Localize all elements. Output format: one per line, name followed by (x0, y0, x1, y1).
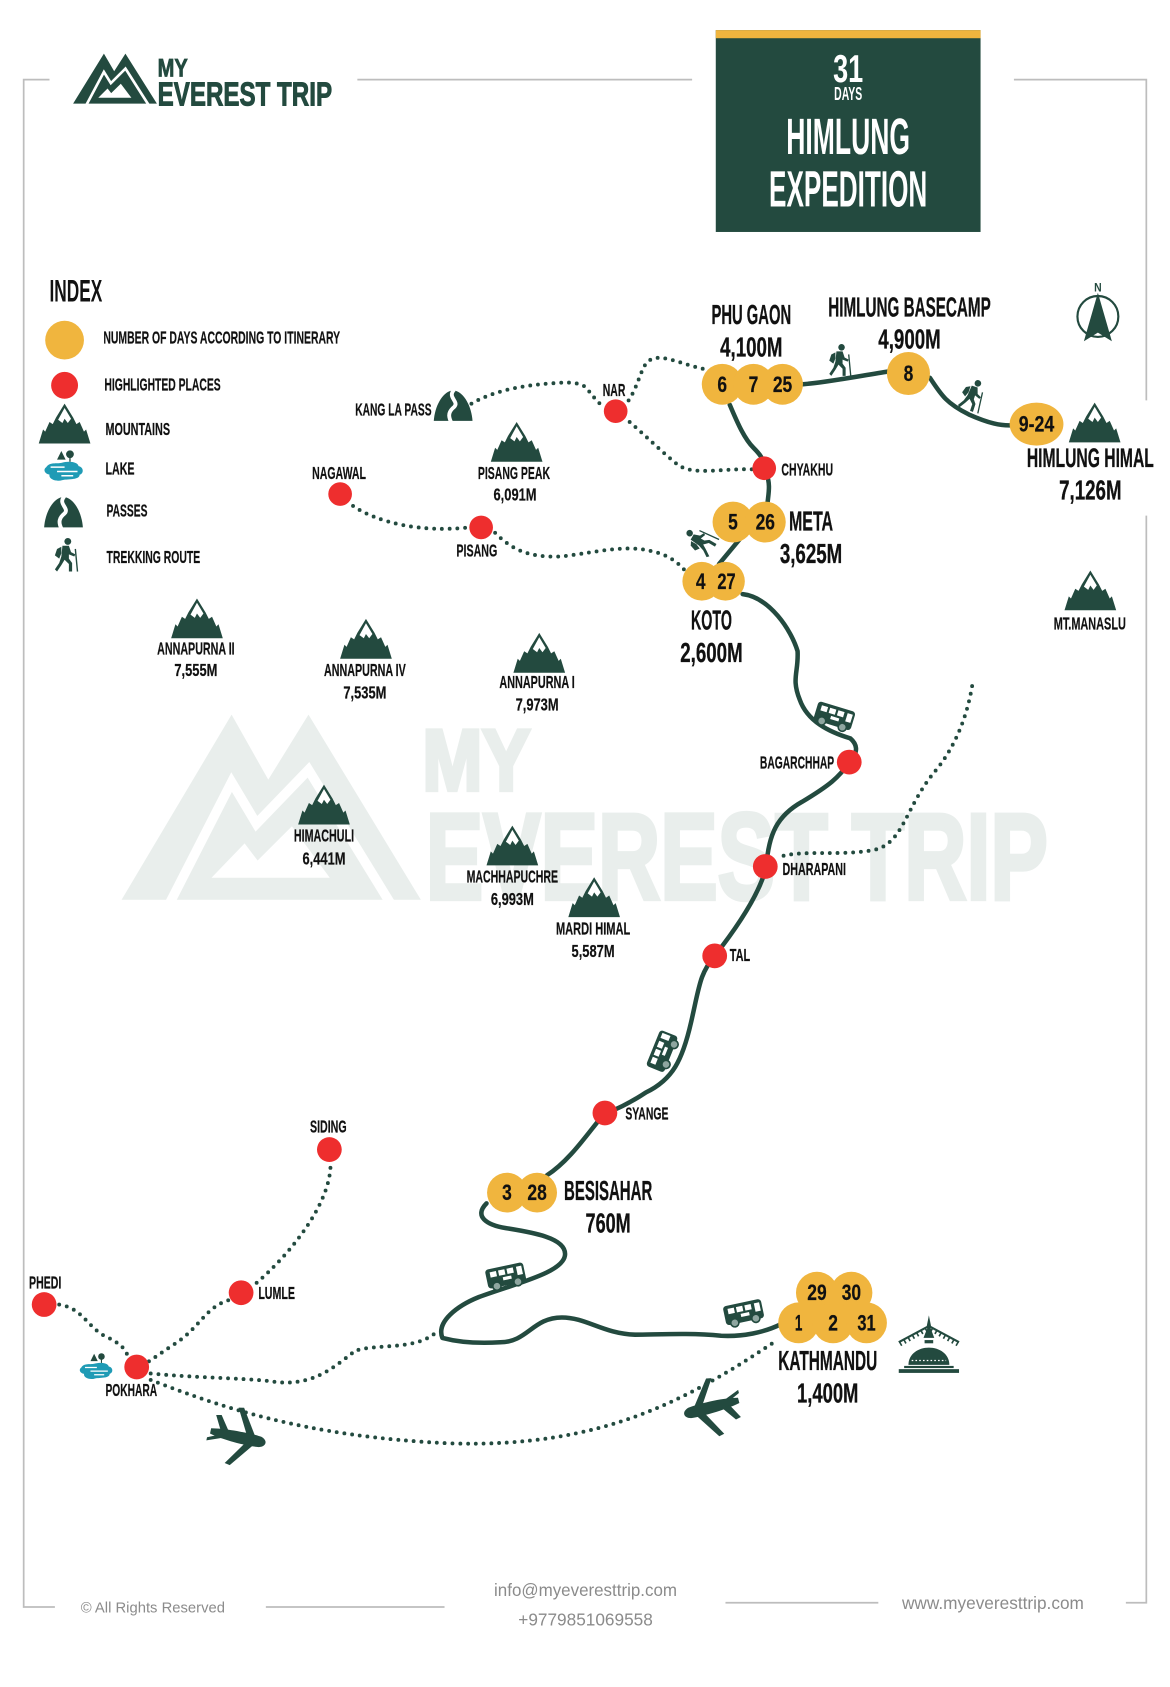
title panel: 31 (833, 48, 863, 91)
label: phu gaon: PHU GAON (711, 299, 791, 330)
mountain: annapurna i: ANNAPURNA I (499, 672, 575, 692)
title panel (716, 30, 981, 232)
index legend: INDEX (50, 273, 102, 308)
icon: climber near meta (681, 524, 719, 558)
days: koto (682, 562, 745, 601)
mountain: himlung himal (1027, 403, 1154, 505)
days: phu gaon: 7 (749, 372, 758, 397)
mountain: manaslu (1054, 570, 1126, 634)
days: phu gaon: 6 (717, 372, 727, 397)
solid trekking route north section (441, 371, 1014, 1343)
days: kathmandu: 30 (842, 1280, 861, 1305)
mountain: machhapuchre: MACHHAPUCHRE (467, 867, 558, 887)
mountain: himlung himal: 7,126M (1059, 474, 1122, 505)
mountain: annapurna ii (157, 598, 235, 680)
footer: copyright: © All Rights Reserved (81, 1600, 225, 1616)
days: meta: 5 (728, 510, 738, 535)
logo: EVEREST TRIP (158, 76, 332, 113)
mountain: pisang peak: PISANG PEAK (478, 463, 550, 483)
place labels: POKHARA (105, 1380, 157, 1400)
place labels: KANG LA PASS (355, 399, 432, 419)
index legend: PASSES (107, 501, 148, 521)
place labels: DHARAPANI (783, 859, 846, 879)
mountain: himachuli: 6,441M (302, 848, 346, 868)
mountain: annapurna iv: 7,535M (343, 683, 386, 703)
days: meta (713, 502, 786, 542)
watermark logo: MY (422, 713, 530, 809)
label: meta: 3,625M (780, 538, 842, 569)
icon: bus middle (646, 1030, 681, 1074)
index legend (39, 273, 340, 572)
days: kathmandu (778, 1272, 887, 1343)
days: besisahar: 28 (527, 1180, 547, 1205)
logo: MY (158, 55, 188, 82)
label: himlung basecamp: 4,900M (878, 324, 941, 355)
mountain: annapurna ii: ANNAPURNA II (157, 638, 235, 658)
days: koto: 27 (717, 569, 736, 594)
mountain: himachuli: HIMACHULI (294, 826, 354, 846)
mountain: machhapuchre (467, 826, 558, 909)
footer: contact: +9779851069558 (518, 1609, 653, 1629)
place labels: SIDING (310, 1116, 347, 1136)
place labels: NAR (603, 380, 625, 400)
icon: north compass (1077, 281, 1118, 341)
days: kathmandu: 31 (857, 1310, 876, 1335)
label: kathmandu: 1,400M (797, 1378, 858, 1409)
place labels: PISANG (456, 540, 497, 560)
mountain: annapurna ii: 7,555M (174, 660, 217, 680)
days: besisahar: 3 (502, 1180, 512, 1205)
place labels: LUMLE (258, 1283, 295, 1303)
icon: bus near kathmandu (723, 1299, 765, 1329)
label: besisahar: 760M (586, 1207, 631, 1238)
highlighted places markers (32, 399, 862, 1379)
title panel: DAYS (834, 83, 862, 104)
mountain: pisang peak (478, 422, 550, 505)
index legend: TREKKING ROUTE (107, 547, 200, 567)
mountain: himachuli (294, 785, 354, 868)
place labels (29, 380, 846, 1400)
title panel: HIMLUNG (786, 108, 910, 165)
icon: bus lower (485, 1262, 527, 1292)
mountain: manaslu: MT.MANASLU (1054, 614, 1126, 634)
footer: contact (494, 1580, 677, 1629)
icon: hiker to himlung himal (957, 376, 988, 413)
icon: pokhara lake (80, 1353, 112, 1379)
icon: bus upper (812, 701, 856, 734)
days: phu gaon (702, 364, 803, 405)
mountain: annapurna iv: ANNAPURNA IV (324, 660, 406, 680)
footer: contact: info@myeveresttrip.com (494, 1580, 677, 1600)
icon: stupa (899, 1315, 959, 1373)
label: himlung basecamp: HIMLUNG BASECAMP (828, 291, 991, 322)
label: besisahar (564, 1175, 652, 1238)
label: phu gaon: 4,100M (720, 331, 783, 362)
mountain: mardi himal: 5,587M (572, 941, 615, 961)
watermark logo (122, 713, 1048, 926)
index legend: NUMBER OF DAYS ACCORDING TO ITINERARY (103, 327, 340, 347)
days: meta: 26 (756, 510, 775, 535)
label: meta (780, 506, 842, 569)
days: kathmandu: 1 (795, 1310, 802, 1335)
label: koto: 2,600M (680, 637, 743, 668)
label: meta: META (789, 506, 833, 537)
dotted trekking routes (59, 358, 973, 1444)
label: himlung basecamp (828, 291, 991, 355)
days: kathmandu: 2 (828, 1310, 838, 1335)
days: kathmandu: 29 (807, 1280, 827, 1305)
place labels: PHEDI (29, 1272, 61, 1292)
label: phu gaon (711, 299, 791, 362)
label: kathmandu: KATHMANDU (778, 1345, 877, 1376)
index legend: HIGHLIGHTED PLACES (104, 375, 221, 395)
mountain: mardi himal (556, 877, 630, 961)
footer: website: www.myeveresttrip.com (901, 1593, 1084, 1613)
place labels: SYANGE (625, 1103, 669, 1123)
days: phu gaon: 25 (773, 372, 792, 397)
label: koto (680, 605, 743, 668)
label: kathmandu (778, 1345, 877, 1409)
mountain: annapurna i: 7,973M (516, 694, 559, 714)
index legend: LAKE (105, 459, 135, 479)
icon: hiker to basecamp (829, 344, 851, 376)
index legend: MOUNTAINS (105, 419, 170, 439)
label: koto: KOTO (691, 605, 732, 636)
logo (73, 54, 332, 113)
days: himlung himal: 9-24 (1019, 412, 1055, 437)
place labels: NAGAWAL (312, 463, 366, 483)
icon: north compass: N (1094, 281, 1102, 295)
icon: plane left (202, 1401, 272, 1471)
mountain: mardi himal: MARDI HIMAL (556, 918, 630, 938)
mountain: annapurna i (499, 633, 575, 714)
place labels: TAL (730, 945, 750, 965)
place labels: CHYAKHU (781, 460, 833, 480)
days: himlung basecamp (887, 352, 930, 395)
title panel: EXPEDITION (769, 161, 927, 218)
days: himlung himal (1010, 403, 1063, 446)
days: koto: 4 (696, 569, 706, 594)
place labels: BAGARCHHAP (760, 753, 834, 773)
mountain: machhapuchre: 6,993M (491, 889, 534, 909)
mountain: annapurna iv (324, 619, 406, 703)
icon: kang la pass (434, 390, 473, 422)
label: besisahar: BESISAHAR (564, 1175, 652, 1206)
mountain: pisang peak: 6,091M (494, 485, 537, 505)
icon: plane right (677, 1371, 748, 1444)
days: besisahar (487, 1173, 557, 1213)
days: himlung basecamp: 8 (904, 361, 913, 386)
